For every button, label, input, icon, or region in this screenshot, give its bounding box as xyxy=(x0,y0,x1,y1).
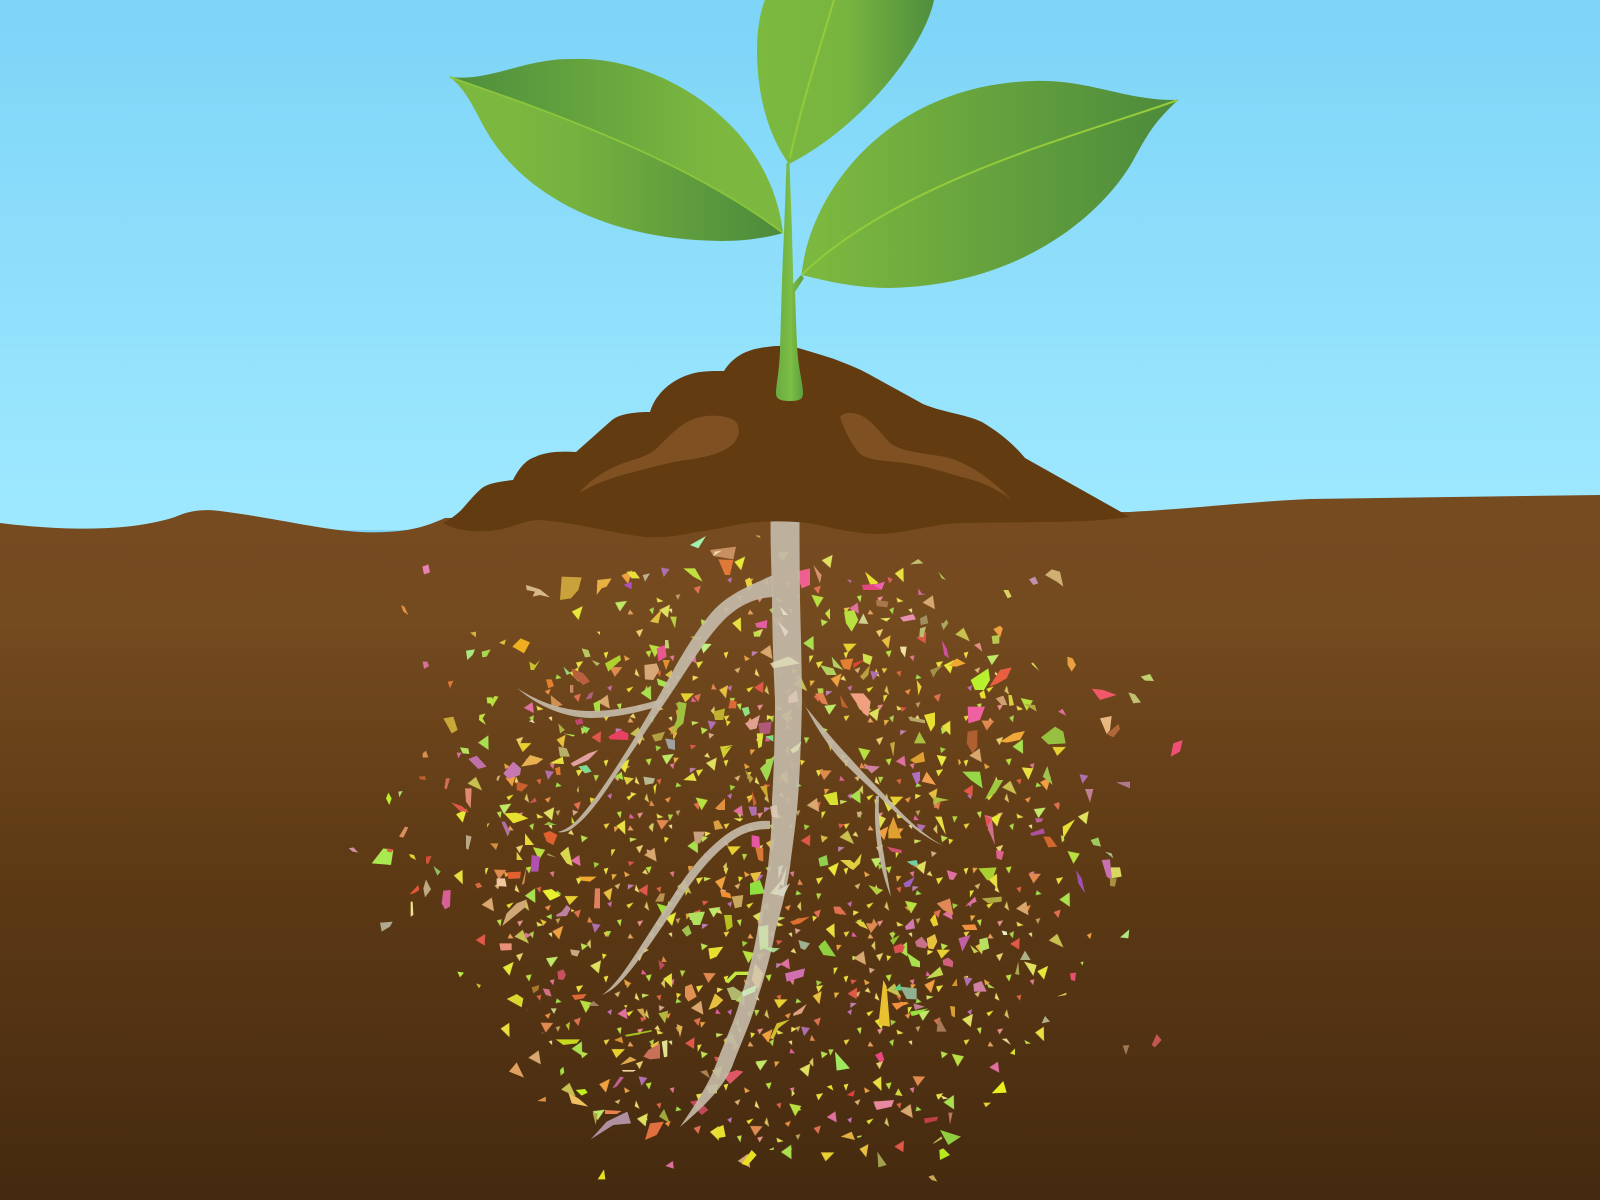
left leaf xyxy=(450,59,783,241)
taproot xyxy=(680,521,802,1127)
soil fragments: lower right xyxy=(900,929,1162,1182)
upper left branch xyxy=(558,575,773,832)
mound highlight: right xyxy=(840,413,1011,499)
right branch xyxy=(801,697,944,846)
right leaf xyxy=(802,81,1178,288)
pale fragments over the lower root xyxy=(742,865,783,997)
soil fragments: centre xyxy=(597,536,902,920)
middle leaf xyxy=(757,0,934,164)
lower left branch xyxy=(602,821,770,995)
soil fragments: lower centre xyxy=(625,907,908,1167)
soil fragments: left xyxy=(349,564,600,957)
sky xyxy=(0,0,1600,530)
pale fragments over the root xyxy=(770,607,802,897)
left side rootlet xyxy=(517,688,664,718)
ground soil xyxy=(0,495,1600,1200)
stem xyxy=(776,163,804,401)
soil fragments: lower left xyxy=(457,969,640,1179)
fine soil fragments xyxy=(454,535,1092,1169)
mound highlight: left xyxy=(579,416,739,493)
root system xyxy=(517,521,944,1127)
plant xyxy=(450,0,1178,401)
right side rootlet xyxy=(875,796,891,897)
soil mound xyxy=(443,346,1130,537)
soil fragments: right xyxy=(900,559,1183,930)
